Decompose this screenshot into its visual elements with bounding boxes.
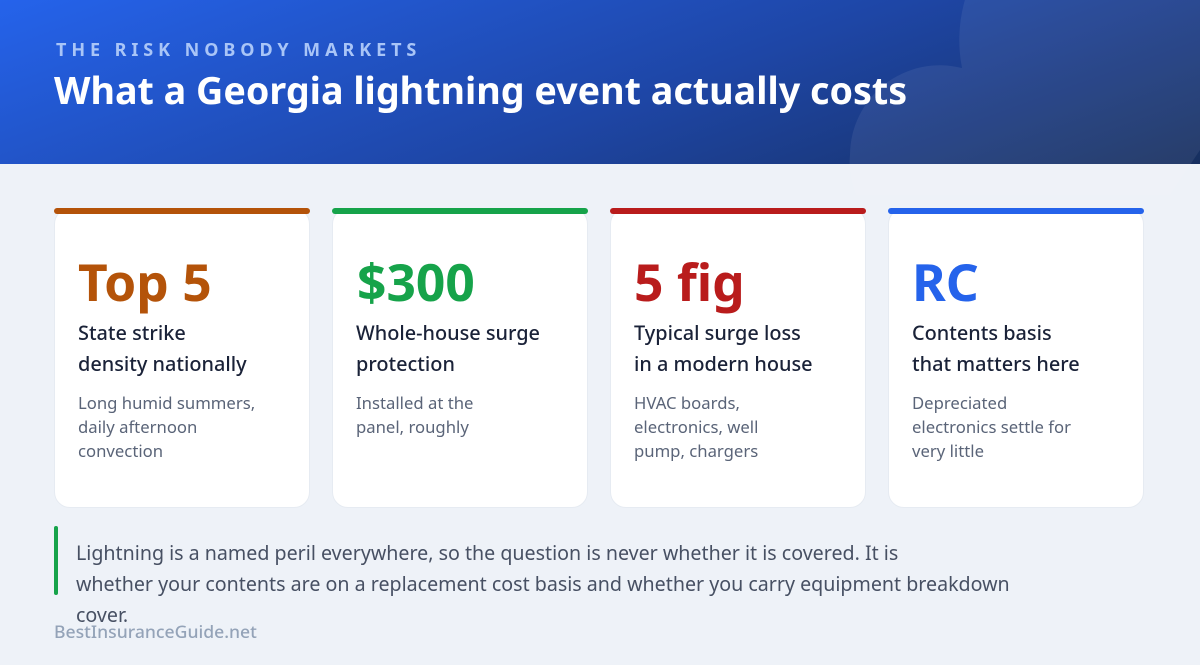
card: Top 5: daily afternoon [78,415,197,438]
callout text: Lightning is a named peril everywhere, so the question is never whether it is covered. It is [76,539,898,566]
card: Top 5: density nationally [78,350,247,377]
footer brand: BestInsuranceGuide.net [54,620,257,644]
card: $300: Installed at the [356,391,473,414]
card: 5 fig: 5 fig [634,247,745,317]
callout accent bar [54,526,58,595]
card: RC: RC [912,247,979,317]
card: Top 5: convection [78,439,163,462]
card: $300: panel, roughly [356,415,469,438]
card: Top 5: Long humid summers, [78,391,255,414]
eyebrow: THE RISK NOBODY MARKETS [56,38,421,62]
card: $300 [332,208,588,508]
title: What a Georgia lightning event actually costs [54,65,907,116]
accent bar: $300 [332,208,588,214]
card: 5 fig: Typical surge loss [634,319,801,346]
card: RC: electronics settle for [912,415,1071,438]
card: $300: Whole-house surge [356,319,540,346]
card: Top 5 [54,208,310,508]
accent bar: RC [888,208,1144,214]
card: RC: Contents basis [912,319,1052,346]
accent bar: 5 fig [610,208,866,214]
card: $300: $300 [357,247,475,317]
card: Top 5: Top 5 [78,247,212,317]
card: RC [888,208,1144,508]
header banner [0,0,1200,164]
callout text: cover. [76,601,128,628]
callout text [76,539,1010,628]
card: 5 fig: electronics, well [634,415,758,438]
card: 5 fig [610,208,866,508]
card: 5 fig: pump, chargers [634,439,758,462]
card: RC: very little [912,439,984,462]
callout text: whether your contents are on a replacement cost basis and whether you carry equipment breakdown [76,570,1010,597]
card: 5 fig: in a modern house [634,350,813,377]
cloud watermark [850,0,1200,164]
accent bar: Top 5 [54,208,310,214]
card: RC: Depreciated [912,391,1007,414]
card: 5 fig: HVAC boards, [634,391,740,414]
card: Top 5: State strike [78,319,186,346]
card: RC: that matters here [912,350,1080,377]
card: $300: protection [356,350,455,377]
